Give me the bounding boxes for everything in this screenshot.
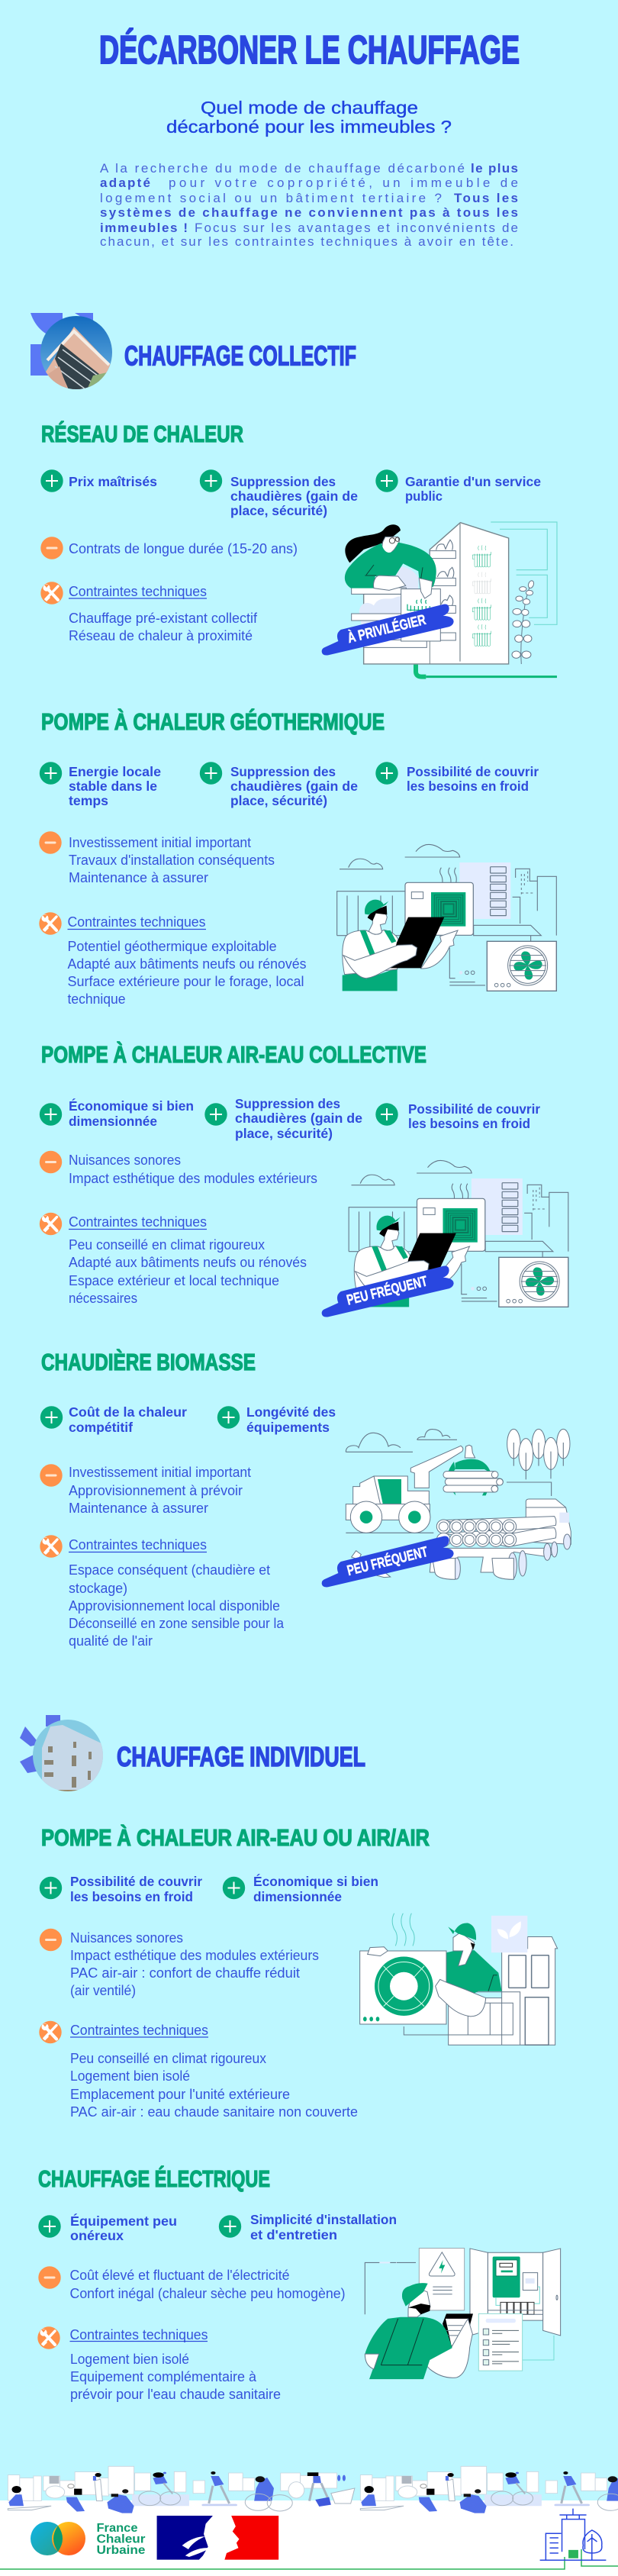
panel: réseau de chaleur bbox=[40, 421, 557, 677]
technical constraints: Adapté aux bâtiments neufs ou rénovés bbox=[67, 956, 307, 972]
drawbacks: Approvisionnement à prévoir bbox=[69, 1483, 243, 1498]
drawback bbox=[40, 537, 298, 559]
intro paragraph: Focus sur les avantages et inconvénients de bbox=[195, 221, 518, 235]
advantage: service public: Garantie d'un service bbox=[405, 474, 541, 489]
technical constraints: Contraintes techniques bbox=[70, 2023, 208, 2038]
advantage: équipement bbox=[38, 2213, 177, 2243]
technical constraints: Contraintes techniques bbox=[69, 1214, 207, 1230]
intro paragraph: immeubles ! bbox=[100, 221, 188, 235]
intro paragraph: le plus bbox=[471, 161, 518, 176]
technical constraints: Surface extérieure pour le forage, local bbox=[67, 974, 304, 989]
logo: france chaleur urbaine: France bbox=[96, 2522, 138, 2535]
technical constraints: Approvisionnement local disponible bbox=[69, 1598, 280, 1614]
advantage: suppression: chaudières (gain de bbox=[235, 1111, 362, 1126]
drawbacks: Investissement initial important bbox=[69, 835, 251, 850]
advantage: suppression: chaudières (gain de bbox=[230, 488, 358, 504]
technical constraints bbox=[40, 582, 258, 643]
icon: building photo bbox=[20, 1715, 107, 1794]
advantage: froid bbox=[40, 1874, 202, 1904]
logo: france chaleur urbaine bbox=[31, 2522, 146, 2557]
advantage: longévité: équipements bbox=[246, 1420, 330, 1435]
advantage: suppression: Suppression des bbox=[235, 1096, 340, 1111]
technical constraints: Adapté aux bâtiments neufs ou rénovés bbox=[69, 1255, 307, 1270]
white ground bbox=[0, 2500, 618, 2576]
advantage: suppression: Suppression des bbox=[230, 474, 336, 489]
advantage: coût: Coût de la chaleur bbox=[69, 1404, 187, 1420]
intro paragraph: logement social ou un bâtiment tertiaire ? bbox=[100, 191, 442, 205]
drawbacks bbox=[38, 2266, 346, 2301]
advantage: économique bbox=[223, 1873, 378, 1904]
technical constraints: Déconseillé en zone sensible pour la bbox=[69, 1616, 285, 1631]
advantage: suppression bbox=[200, 469, 358, 518]
advantage: froid: Possibilité de couvrir bbox=[70, 1874, 202, 1889]
badge: à privilégier: À PRIVILÉGIER bbox=[346, 611, 428, 646]
advantage: énergie locale: temps bbox=[69, 793, 108, 808]
technical constraints bbox=[39, 912, 307, 1007]
technical constraints: Peu conseillé en climat rigoureux bbox=[70, 2051, 266, 2066]
technical constraints: Emplacement pour l'unité extérieure bbox=[70, 2087, 290, 2102]
advantage: froid: les besoins en froid bbox=[408, 1116, 530, 1131]
advantage: prix: Prix maîtrisés bbox=[69, 474, 157, 489]
technical constraints bbox=[39, 2021, 358, 2120]
advantage: froid bbox=[375, 1101, 540, 1131]
advantage: service public: public bbox=[405, 488, 443, 504]
advantage: coût bbox=[40, 1404, 187, 1435]
green pipe bbox=[0, 2549, 618, 2569]
advantage: énergie locale: Energie locale bbox=[69, 764, 161, 779]
section heading: CHAUFFAGE COLLECTIF bbox=[124, 340, 356, 371]
advantage: suppression: place, sécurité) bbox=[235, 1126, 333, 1141]
advantage: suppression bbox=[204, 1096, 362, 1141]
drawbacks: (air ventilé) bbox=[70, 1983, 136, 1998]
advantage: simplicité: et d'entretien bbox=[250, 2227, 337, 2242]
advantage: énergie locale bbox=[40, 762, 161, 808]
panel: chaudière biomasse bbox=[40, 1349, 571, 1649]
technical constraints: Peu conseillé en climat rigoureux bbox=[69, 1237, 265, 1253]
heading: POMPE À CHALEUR GÉOTHERMIQUE bbox=[41, 708, 385, 735]
footer panel bbox=[0, 2466, 618, 2576]
city and people strip bbox=[8, 2466, 618, 2513]
intro paragraph: Tous les bbox=[454, 191, 518, 205]
illustration: technician and heat pump bbox=[337, 844, 556, 991]
drawbacks bbox=[40, 1929, 319, 1998]
panel: pompe à chaleur air-eau ou air/air bbox=[39, 1824, 558, 2120]
advantage: froid bbox=[375, 762, 539, 794]
drawbacks: PAC air-air : confort de chauffe réduit bbox=[70, 1965, 300, 1981]
intro paragraph: adapté bbox=[100, 176, 150, 190]
technical constraints: Contraintes techniques bbox=[69, 584, 207, 599]
heading: RÉSEAU DE CHALEUR bbox=[41, 421, 243, 447]
technical constraints: Logement bien isolé bbox=[70, 2068, 190, 2084]
advantage: prix bbox=[40, 469, 157, 492]
logo: république française bbox=[157, 2516, 278, 2560]
advantage: longévité: Longévité des bbox=[246, 1404, 336, 1420]
advantage: économique: Économique si bien bbox=[69, 1098, 194, 1114]
drawbacks: Nuisances sonores bbox=[69, 1153, 181, 1168]
technical constraints: Contraintes techniques bbox=[67, 914, 206, 930]
logo: france chaleur urbaine: Chaleur bbox=[96, 2532, 145, 2546]
badge shape: peu fréquent bbox=[322, 1266, 454, 1317]
technical constraints: nécessaires bbox=[69, 1291, 137, 1306]
technical constraints: Chauffage pré-existant collectif bbox=[69, 611, 258, 626]
panel: pompe à chaleur air-eau collective bbox=[40, 1041, 568, 1317]
advantage: suppression: Suppression des bbox=[230, 764, 336, 779]
advantage: économique bbox=[40, 1098, 194, 1129]
heading: CHAUFFAGE ÉLECTRIQUE bbox=[38, 2165, 270, 2192]
subtitle bbox=[166, 98, 452, 137]
advantage: froid: Possibilité de couvrir bbox=[408, 1101, 540, 1117]
heading: POMPE À CHALEUR AIR-EAU OU AIR/AIR bbox=[41, 1824, 430, 1851]
icon: building, radiator and tree bbox=[540, 2509, 606, 2560]
panel: pompe à chaleur géothermique bbox=[39, 708, 556, 1007]
logo: france chaleur urbaine: Urbaine bbox=[96, 2544, 146, 2557]
badge: peu fréquent: PEU FRÉQUENT bbox=[346, 1543, 430, 1579]
intro paragraph: A la recherche du mode de chauffage décarboné bbox=[100, 161, 465, 176]
drawbacks: Investissement initial important bbox=[69, 1465, 251, 1480]
drawbacks bbox=[40, 1464, 251, 1516]
drawbacks bbox=[40, 1151, 317, 1186]
badge: peu fréquent: PEU FRÉQUENT bbox=[345, 1272, 430, 1309]
technical constraints: technique bbox=[67, 991, 125, 1007]
technical constraints: Equipement complémentaire à bbox=[70, 2369, 257, 2384]
illustration: technician and heat pump bbox=[349, 1160, 568, 1307]
advantage: suppression: place, sécurité) bbox=[230, 503, 327, 518]
advantage: équipement: Équipement peu bbox=[70, 2213, 177, 2229]
technical constraints: Espace extérieur et local technique bbox=[69, 1273, 279, 1288]
intro paragraph: systèmes de chauffage ne conviennent pas à tous les bbox=[100, 205, 518, 220]
illustration: forestry tractor and log truck bbox=[322, 1429, 571, 1587]
technical constraints: Réseau de chaleur à proximité bbox=[69, 628, 253, 643]
advantage: froid: les besoins en froid bbox=[407, 779, 529, 794]
advantage: service public bbox=[375, 469, 541, 504]
panel: chauffage électrique bbox=[37, 2165, 561, 2402]
technical constraints bbox=[37, 2326, 281, 2402]
technical constraints bbox=[40, 1535, 285, 1649]
drawbacks: Coût élevé et fluctuant de l'électricité bbox=[70, 2268, 290, 2283]
heading: POMPE À CHALEUR AIR-EAU COLLECTIVE bbox=[41, 1041, 426, 1068]
technical constraints: qualité de l'air bbox=[69, 1633, 153, 1649]
header panel bbox=[99, 28, 520, 249]
technical constraints bbox=[40, 1213, 307, 1306]
heading: CHAUDIÈRE BIOMASSE bbox=[41, 1349, 256, 1375]
advantage: longévité bbox=[217, 1404, 336, 1435]
drawbacks: Maintenance à assurer bbox=[69, 1501, 208, 1516]
section: chauffage collectif bbox=[31, 313, 356, 393]
advantage: économique: dimensionnée bbox=[253, 1889, 342, 1904]
technical constraints: Logement bien isolé bbox=[70, 2352, 189, 2367]
technical constraints: prévoir pour l'eau chaude sanitaire bbox=[70, 2387, 281, 2402]
advantage: froid: les besoins en froid bbox=[70, 1889, 193, 1904]
advantage: économique: Économique si bien bbox=[253, 1873, 378, 1889]
technical constraints: Espace conséquent (chaudière et bbox=[69, 1562, 270, 1578]
intro paragraph: chacun, et sur les contraintes techniques à avoir en tête. bbox=[100, 234, 513, 249]
drawbacks: Nuisances sonores bbox=[70, 1930, 183, 1946]
intro paragraph: pour votre copropriété, un immeuble de bbox=[169, 176, 518, 190]
drawbacks: Impact esthétique des modules extérieurs bbox=[70, 1948, 319, 1963]
drawbacks: Maintenance à assurer bbox=[69, 870, 208, 885]
drawbacks: Confort inégal (chaleur sèche peu homogène) bbox=[70, 2286, 345, 2301]
advantage: simplicité bbox=[219, 2212, 397, 2242]
section: chauffage individuel bbox=[20, 1715, 365, 1794]
drawbacks: Impact esthétique des modules extérieurs bbox=[69, 1171, 317, 1186]
advantage: équipement: onéreux bbox=[70, 2228, 124, 2243]
advantage: simplicité: Simplicité d'installation bbox=[250, 2212, 397, 2227]
drawbacks: Travaux d'installation conséquents bbox=[69, 853, 275, 868]
section heading: CHAUFFAGE INDIVIDUEL bbox=[117, 1741, 365, 1772]
advantage: suppression: place, sécurité) bbox=[230, 793, 327, 808]
advantage: froid: Possibilité de couvrir bbox=[407, 764, 539, 779]
advantage: économique: dimensionnée bbox=[69, 1114, 157, 1129]
subtitle: Quel mode de chauffage bbox=[201, 98, 418, 118]
illustration: electrician and panel bbox=[365, 2249, 561, 2379]
advantage: suppression: chaudières (gain de bbox=[230, 779, 358, 794]
advantage: énergie locale: stable dans le bbox=[69, 779, 157, 794]
technical constraints: stockage) bbox=[69, 1581, 127, 1596]
icon: building photo bbox=[31, 313, 114, 393]
illustration: technician with outdoor unit bbox=[360, 1913, 558, 2045]
intro paragraph bbox=[100, 161, 518, 249]
illustration: woman and heated building bbox=[322, 522, 557, 677]
technical constraints: Potentiel géothermique exploitable bbox=[67, 939, 276, 954]
drawbacks bbox=[39, 831, 275, 885]
technical constraints: PAC air-air : eau chaude sanitaire non couverte bbox=[70, 2104, 358, 2120]
subtitle: décarboné pour les immeubles ? bbox=[166, 117, 452, 137]
technical constraints: Contraintes techniques bbox=[70, 2327, 208, 2342]
advantage: coût: compétitif bbox=[69, 1420, 133, 1435]
technical constraints: Contraintes techniques bbox=[69, 1537, 207, 1552]
drawback: Contrats de longue durée (15-20 ans) bbox=[69, 541, 298, 556]
advantage: suppression bbox=[200, 762, 358, 808]
